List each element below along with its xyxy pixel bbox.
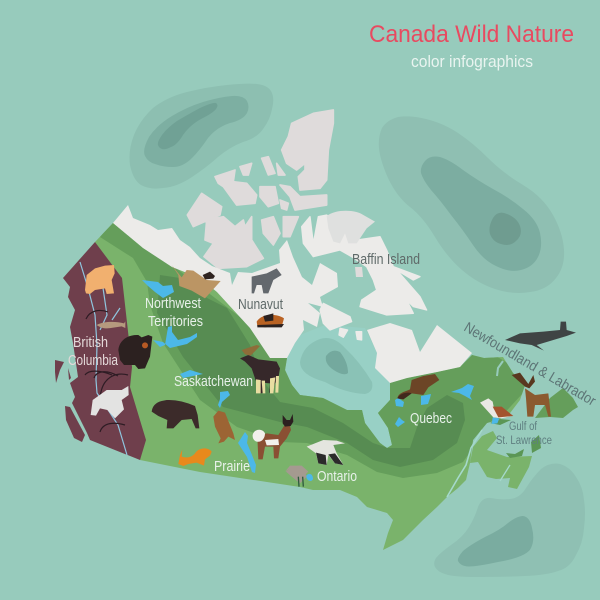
animal: snow goose [307,440,345,465]
label: Northwest Territories: Territories [148,314,203,330]
animal: wolverine [257,313,284,327]
animal: black bear [118,335,152,369]
animal: mountain goat [91,386,129,418]
label: Northwest Territories: Northwest [145,296,201,312]
St. Lawrence river [447,430,482,497]
label: Gulf of St. Lawrence: St. Lawrence [496,435,552,447]
title: Canada Wild Nature [369,21,574,48]
Vancouver Island and coastal islands [55,360,85,442]
animal: kermode bear [85,265,115,294]
Labrador inlet [497,361,503,376]
animal: flying squirrel [172,265,221,298]
Newfoundland [535,388,578,418]
mountain ridges [85,310,128,432]
arctic tundra: northern Quebec [367,323,472,383]
animal: caribou [512,373,551,417]
arctic tundra: mainland [113,205,338,358]
region labels [68,252,452,485]
arctic tundra: Baffin Island [302,215,427,340]
green land with vegetation bands [95,223,524,550]
Baffin inner lake [355,267,363,277]
animal: polar bear [327,211,375,243]
Gulf islands [490,419,541,458]
Maritimes land [470,431,532,489]
label: Prairie: Prairie [214,459,250,475]
label: Ontario: Ontario [317,469,357,485]
animal: sandhill crane [285,466,308,487]
subtitle: color infographics [411,52,533,71]
ocean depth: top-left contour blob [130,84,273,189]
animal: moose [240,345,280,393]
animal: pronghorn [253,414,293,459]
animal: ground squirrel [178,448,212,466]
label: Saskatchewan: Saskatchewan [174,374,253,390]
freshwater lakes [142,280,474,481]
animal: blue-footed booby [480,398,513,424]
animal: whale [505,322,576,351]
arctic tundra: north islands [187,110,333,268]
label: Baffin Island: Baffin Island [352,252,420,268]
ocean depth: right contour blob [379,116,564,293]
British Columbia mountains [63,242,146,460]
animal: beaver [397,374,439,399]
animal: salmon [97,321,125,328]
Hudson Bay [285,325,394,452]
label: British Columbia: British [73,335,108,351]
Hudson Bay depth contour [300,338,372,394]
ocean depth: bottom-right contour blob [434,464,585,577]
label: Quebec: Quebec [410,411,452,427]
label: Gulf of St. Lawrence: Gulf of [509,421,538,433]
mountain rivers [80,262,127,455]
New Brunswick channel [500,465,510,481]
label: British Columbia: Columbia [68,353,119,369]
label: Nunavut: Nunavut [238,297,283,313]
animal: burrowing owl [213,411,235,443]
animal: crane [286,466,307,483]
animal: arctic wolf [252,268,282,293]
animal: bison [152,400,199,428]
